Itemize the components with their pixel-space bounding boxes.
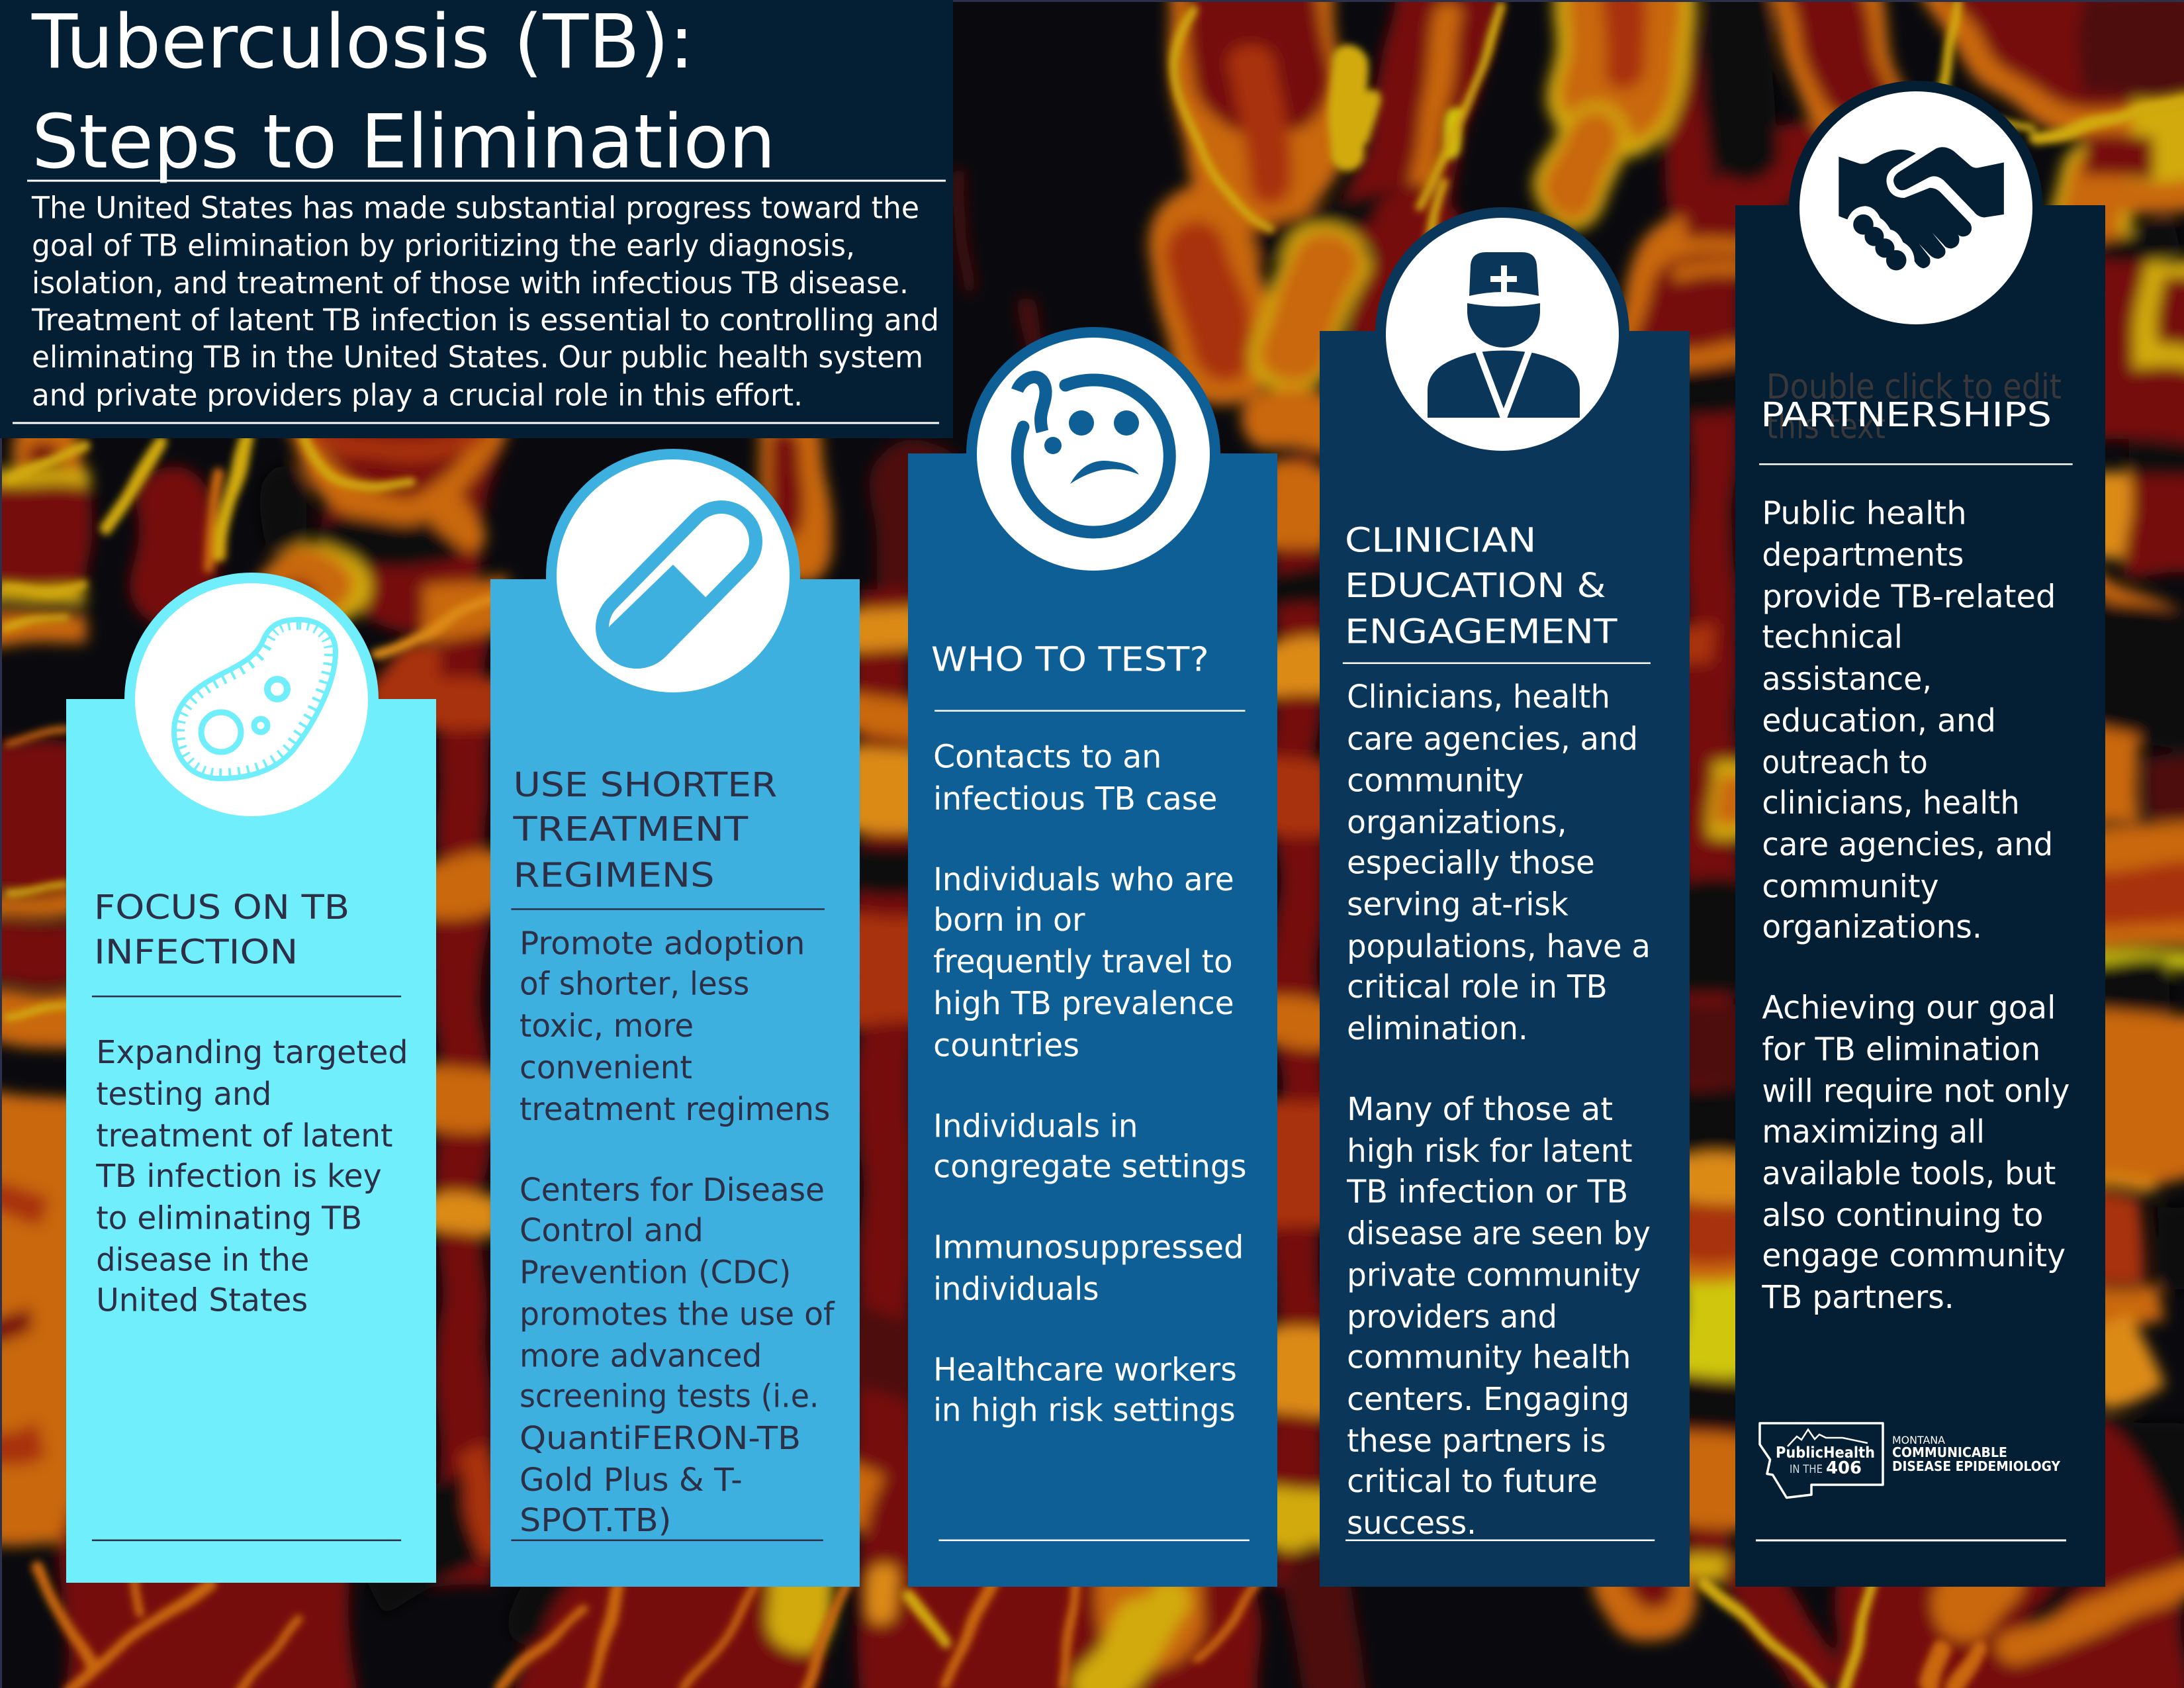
panel 4 text: Clinicians, health	[1347, 679, 1610, 716]
ghost placeholder text: Double click to edit	[1766, 367, 2062, 407]
panel 4 text: centers. Engaging	[1347, 1381, 1629, 1418]
panel 2 text: USE SHORTER	[514, 766, 777, 805]
logo: Public Health in the 406: 406	[1826, 1458, 1862, 1478]
panel 2 text: Promote adoption	[520, 925, 805, 962]
introduction text: eliminating TB in the United States. Our public health system	[32, 340, 923, 375]
fine highlights	[1177, 11, 1270, 230]
panel 2 text: Centers for Disease	[520, 1172, 825, 1209]
panel: title and introduction	[0, 0, 953, 438]
panel 4 text: success.	[1347, 1505, 1477, 1542]
panel 1 text: Expanding targeted	[96, 1034, 408, 1071]
introduction text: Treatment of latent TB infection is essential to controlling and	[31, 303, 939, 338]
panel 5 text: also continuing to	[1762, 1197, 2043, 1234]
icon: handshake	[1799, 91, 2032, 324]
title	[31, 0, 776, 185]
panel 4 text: providers and	[1347, 1299, 1557, 1336]
title: Tuberculosis (TB):	[31, 0, 694, 85]
panel 5 text: organizations.	[1762, 908, 1982, 945]
panel 1 text: treatment of latent	[96, 1117, 392, 1154]
panel 5 text: PARTNERSHIPS	[1760, 396, 2052, 435]
panel: focus on TB infection	[66, 573, 436, 1583]
icon: bacterium	[135, 583, 368, 816]
panel 2 text	[511, 766, 835, 1541]
icon: doctor	[1386, 218, 1619, 451]
gap 4/5	[1700, 209, 1724, 1588]
panel 4 text: critical role in TB	[1347, 968, 1608, 1006]
panel 5 text: will require not only	[1762, 1073, 2070, 1110]
panel 2 text: Prevention (CDC)	[520, 1254, 791, 1291]
introduction text	[31, 191, 939, 413]
panel 5 text: available tools, but	[1762, 1155, 2056, 1192]
panel 1 text: TB infection is key	[95, 1158, 382, 1195]
far right stripes	[2082, 21, 2184, 68]
panel 5 text: clinicians, health	[1762, 784, 2020, 821]
panel 4 text: critical to future	[1347, 1463, 1598, 1500]
panel 4 text: community health	[1347, 1339, 1631, 1376]
panel 5 text: assistance,	[1762, 661, 1932, 698]
panel 2 text: TREATMENT	[512, 810, 749, 849]
logo: Public Health in the 406	[1760, 1423, 2060, 1497]
panel 3 text: Individuals who are	[933, 861, 1234, 898]
panel 1 text: FOCUS ON TB	[94, 888, 349, 927]
logo: Public Health in the 406: DISEASE EPIDEMIOLOGY	[1892, 1458, 2060, 1474]
panel 4 text: community	[1347, 762, 1524, 799]
panel 5 text: for TB elimination	[1762, 1031, 2040, 1068]
panel: who to test	[908, 327, 1277, 1587]
panel 2 text: Gold Plus & T-	[520, 1462, 743, 1499]
bottom band	[138, 1560, 274, 1688]
panel 2 text: REGIMENS	[514, 857, 715, 896]
panel 2 text: treatment regimens	[520, 1091, 830, 1128]
panel 5 text: maximizing all	[1762, 1113, 1985, 1150]
panel 4 text: these partners is	[1347, 1423, 1606, 1460]
panel 1 text: testing and	[96, 1076, 271, 1113]
panel 5 text: engage community	[1762, 1237, 2066, 1274]
top right masses	[1028, 306, 1042, 432]
panel 5 text: Achieving our goal	[1762, 989, 2056, 1026]
panel 4 text: especially those	[1347, 845, 1595, 882]
gap 2/3	[872, 585, 897, 1588]
panel 3 text: countries	[933, 1027, 1079, 1064]
panel 4 text: CLINICIAN	[1345, 521, 1536, 560]
panel 2 text: promotes the use of	[520, 1295, 835, 1333]
panel 1 text	[92, 888, 408, 1541]
panel 4 text: serving at-risk	[1347, 886, 1569, 923]
panel 3 text: high TB prevalence	[933, 985, 1234, 1022]
panel 5 text: technical	[1762, 619, 1903, 656]
ghost placeholder text	[1766, 367, 2062, 447]
panel 5 text	[1759, 396, 2073, 1316]
panel 3 text: in high risk settings	[933, 1392, 1236, 1429]
panel 5 text: provide TB-related	[1762, 579, 2056, 616]
panel 4 text: Many of those at	[1347, 1091, 1613, 1128]
panel 3 text: WHO TO TEST?	[931, 640, 1209, 679]
below title	[404, 439, 418, 543]
panel 2 text: Control and	[520, 1212, 704, 1249]
panel 2 text: screening tests (i.e.	[520, 1378, 819, 1415]
panel 4 text: EDUCATION &	[1345, 567, 1606, 606]
panel 3 text: Contacts to an	[933, 739, 1161, 776]
icon: capsule	[557, 459, 790, 692]
panel 3 text: Individuals in	[933, 1107, 1138, 1145]
panel 4 text	[1343, 521, 1655, 1542]
panel 1 text: disease in the	[96, 1241, 309, 1278]
panel 3 text: individuals	[933, 1271, 1099, 1308]
panel 4 text: private community	[1347, 1257, 1641, 1294]
panel 2 text: QuantiFERON-TB	[520, 1420, 801, 1457]
panel 1 text: to eliminating TB	[96, 1199, 362, 1237]
panel 2 text: toxic, more	[520, 1008, 694, 1045]
panel 1 text: INFECTION	[94, 933, 298, 972]
panel 4 text: high risk for latent	[1347, 1133, 1633, 1170]
panel 5 text: education, and	[1762, 702, 1996, 739]
panel 5 text: outreach to	[1762, 744, 1928, 781]
introduction text: goal of TB elimination by prioritizing the early diagnosis,	[32, 228, 855, 263]
panel 4 text: organizations,	[1347, 804, 1567, 841]
panel 2 text: convenient	[520, 1049, 692, 1086]
panel 5 text: Public health	[1762, 494, 1967, 532]
panel 5 text: community	[1762, 868, 1939, 905]
logo: Public Health in the 406: IN THE	[1790, 1463, 1823, 1476]
panel 2 text: of shorter, less	[520, 966, 749, 1003]
title: Steps to Elimination	[32, 99, 776, 185]
introduction text: The United States has made substantial progress toward the	[31, 191, 919, 225]
introduction text: isolation, and treatment of those with infectious TB disease.	[32, 265, 909, 301]
panel 2 text: more advanced	[520, 1338, 762, 1375]
panel 3 text: congregate settings	[933, 1148, 1247, 1185]
panel: clinician education and engagement	[1320, 207, 1690, 1587]
gap 3/4	[1287, 460, 1309, 1588]
panel 4 text: care agencies, and	[1347, 720, 1638, 757]
panel 4 text: elimination.	[1347, 1010, 1528, 1047]
panel 4 text: disease are seen by	[1347, 1215, 1651, 1252]
panel 3 text: born in or	[933, 902, 1085, 939]
panel 1 text: United States	[96, 1282, 308, 1319]
icon: worried face with question mark	[977, 338, 1210, 571]
gap 1/2	[450, 627, 475, 1588]
logo: Public Health in the 406: MONTANA	[1892, 1434, 1945, 1446]
logo: Public Health in the 406: COMMUNICABLE	[1892, 1444, 2007, 1460]
panel: partnerships	[1735, 81, 2105, 1587]
panel 5 text: care agencies, and	[1762, 826, 2053, 863]
logo: Public Health in the 406: PublicHealth	[1776, 1444, 1875, 1462]
panel 3 text: Healthcare workers	[933, 1352, 1237, 1389]
panel 3 text: infectious TB case	[933, 780, 1217, 818]
panel 2 text: SPOT.TB)	[520, 1502, 671, 1539]
panel 5 text: TB partners.	[1761, 1279, 1954, 1316]
panel 4 text: ENGAGEMENT	[1345, 612, 1617, 651]
introduction text: and private providers play a crucial role in this effort.	[32, 377, 803, 413]
panel 4 text: populations, have a	[1347, 928, 1651, 965]
panel 3 text	[931, 640, 1250, 1541]
panel 4 text: TB infection or TB	[1346, 1173, 1628, 1210]
panel 3 text: frequently travel to	[933, 943, 1233, 980]
ghost placeholder text: this text	[1766, 407, 1886, 447]
panel 5 text: departments	[1762, 536, 1964, 573]
panel: use shorter treatment regimens	[490, 449, 860, 1587]
panel 3 text: Immunosuppressed	[933, 1229, 1244, 1266]
